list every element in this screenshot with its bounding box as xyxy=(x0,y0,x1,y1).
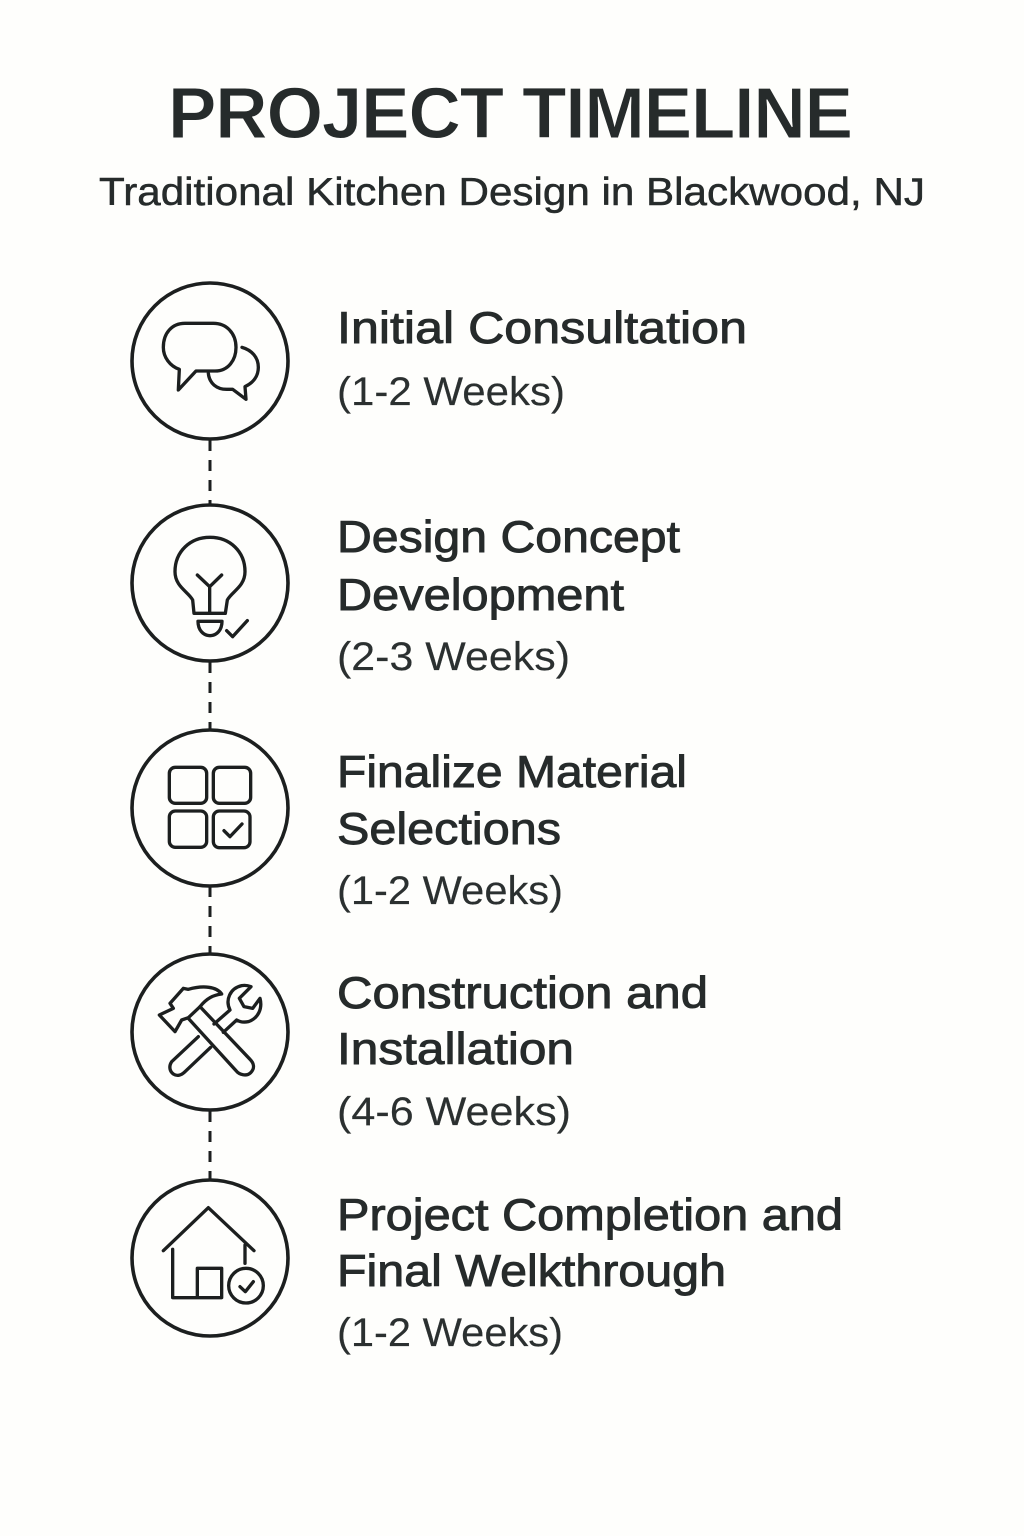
panel: step 1 initial consultation xyxy=(132,283,747,439)
step 4 text: Construction and xyxy=(337,969,708,1018)
step 5 text: Final Welkthrough xyxy=(337,1247,726,1296)
step 5 text: Project Completion and xyxy=(337,1191,843,1240)
step 4 text: Installation xyxy=(337,1025,574,1074)
step 4 text: (4-6 Weeks) xyxy=(337,1090,571,1134)
step 5 text: (1-2 Weeks) xyxy=(337,1311,563,1355)
subtitle: Traditional Kitchen Design in Blackwood, NJ xyxy=(99,171,925,214)
step 4 text xyxy=(337,969,708,1134)
step 3 text: Selections xyxy=(337,805,561,854)
step 2 text: Development xyxy=(337,571,625,620)
step 3 text xyxy=(337,748,687,913)
panel: step 5 project completion xyxy=(132,1180,843,1355)
panel: step 3 finalize material selections xyxy=(132,730,687,913)
icon: material swatches grid in circle xyxy=(132,730,288,886)
connector: step 4 to 5 xyxy=(208,1111,212,1179)
title: PROJECT TIMELINE xyxy=(168,73,853,154)
icon: light bulb with check in circle xyxy=(132,505,288,661)
panel: step 2 design concept development xyxy=(132,505,681,679)
step 1 text: Initial Consultation xyxy=(337,304,747,353)
step 2 text xyxy=(337,513,681,679)
connector: step 2 to 3 xyxy=(208,662,212,729)
step 2 text: (2-3 Weeks) xyxy=(337,635,570,679)
panel: step 4 construction and installation xyxy=(132,954,708,1134)
step 2 text: Design Concept xyxy=(337,513,681,562)
icon: crossed hammer and wrench in circle xyxy=(132,954,288,1110)
step 1 text: (1-2 Weeks) xyxy=(337,370,565,414)
step 3 text: (1-2 Weeks) xyxy=(337,869,563,913)
step 5 text xyxy=(337,1191,843,1355)
step 3 text: Finalize Material xyxy=(337,748,687,797)
connector: step 3 to 4 xyxy=(208,886,212,953)
icon: house with check badge in circle xyxy=(132,1180,288,1336)
connector: step 1 to 2 xyxy=(208,440,212,505)
step 1 text xyxy=(337,304,747,414)
icon: chat bubbles in circle xyxy=(132,283,288,439)
